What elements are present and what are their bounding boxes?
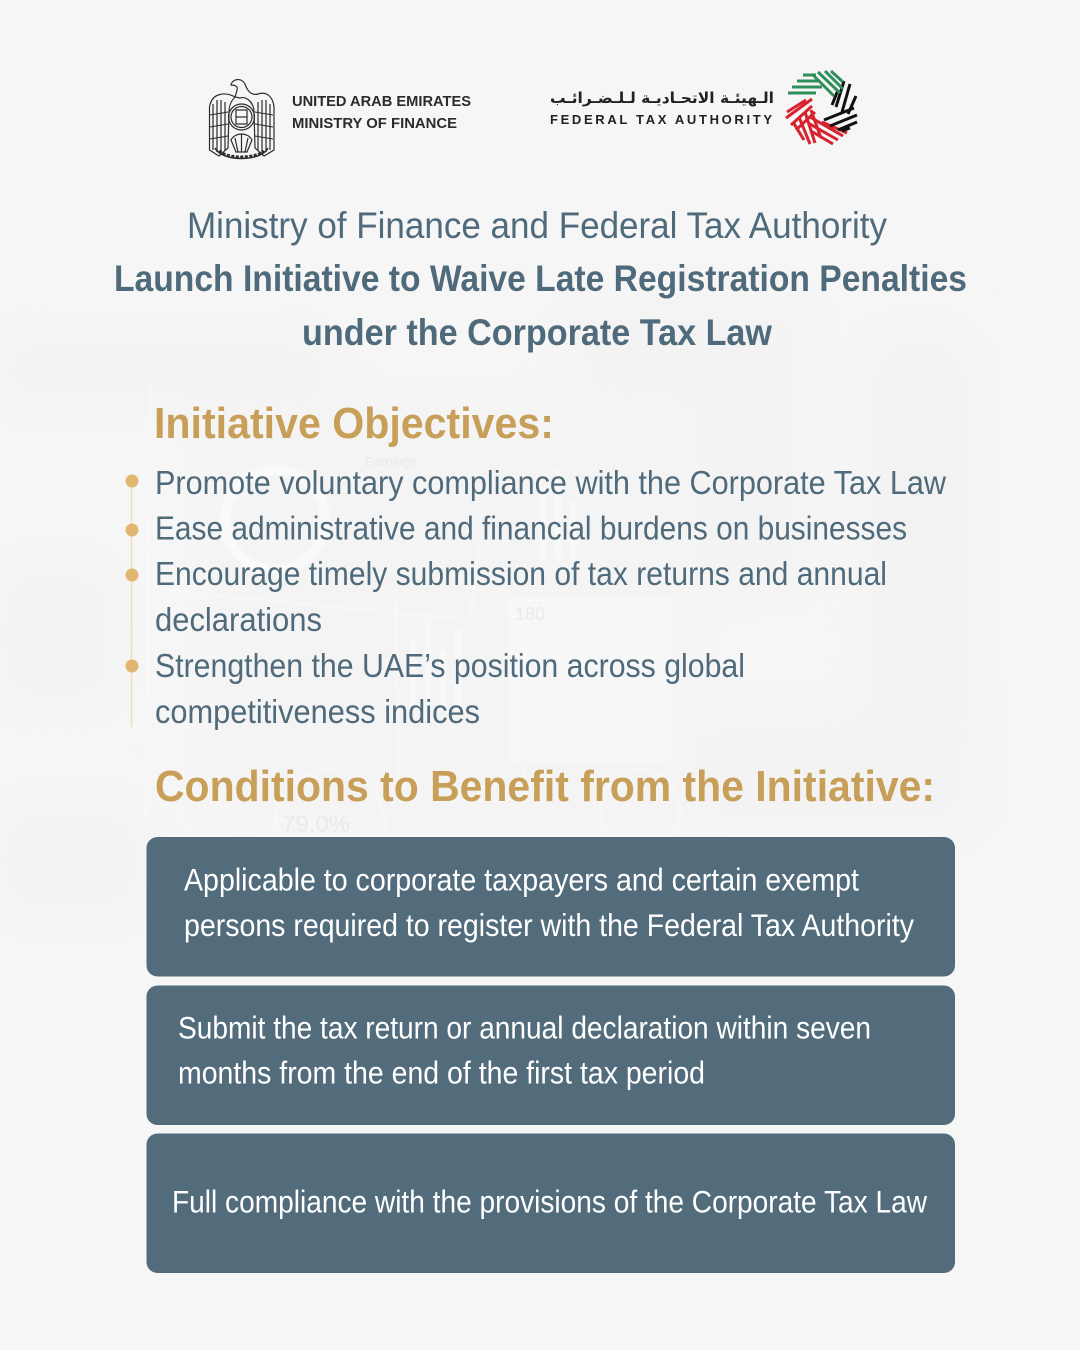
objective 2: Ease administrative and financial burdens on businesses [155, 510, 907, 546]
objective 4 [155, 647, 745, 730]
bullet 4 [126, 660, 138, 672]
panel: condition 3: Full compliance with the provisions of the Corporate Tax Law [172, 1184, 927, 1220]
panel: condition 1 [146, 837, 955, 976]
faded background photo: 180 [515, 604, 545, 624]
objective 3: Encourage timely submission of tax returns and annual [155, 555, 887, 592]
text: ministry name: UNITED ARAB EMIRATES [292, 94, 471, 110]
panel: condition 2 [146, 986, 955, 1125]
panel: objectives list [126, 464, 946, 730]
logo: UAE Ministry of Finance [210, 80, 471, 158]
text: authority name: الـهيئـة الاتحـاديـة لـلـضـرائـب [550, 89, 774, 107]
objective 4: Strengthen the UAE’s position across global [155, 647, 745, 684]
icon: FTA ring symbol [786, 71, 857, 144]
panel: condition 2: Submit the tax return or annual declaration within seven [178, 1010, 871, 1046]
objective 3 [155, 555, 887, 638]
bullet 3 [126, 568, 138, 582]
title: Ministry of Finance and Federal Tax Authority [187, 205, 887, 246]
panel: condition 2: months from the end of the first tax period [178, 1054, 705, 1090]
logo: Federal Tax Authority [550, 71, 857, 144]
bullet 2 [126, 524, 138, 536]
faded background photo [0, 300, 980, 910]
text: authority name [550, 89, 774, 127]
heading: initiative objectives: Initiative Objectives: [154, 399, 554, 448]
faded background photo: 79.0% [282, 811, 350, 838]
title: Launch Initiative to Waive Late Registration Penalties [114, 258, 967, 299]
icon: UAE emblem eagle [210, 80, 274, 158]
bullet 1 [126, 474, 138, 488]
objective 3: declarations [155, 601, 322, 638]
heading: conditions: Conditions to Benefit from the Initiative: [155, 762, 935, 811]
panel: condition 3 [146, 1134, 955, 1273]
objective 1: Promote voluntary compliance with the Corporate Tax Law [155, 464, 946, 501]
text: ministry name: MINISTRY OF FINANCE [292, 116, 457, 132]
faded background photo: Earnings [365, 454, 417, 469]
panel: condition 1: persons required to register with the Federal Tax Authority [184, 907, 914, 943]
title [114, 205, 967, 353]
panel: condition 1: Applicable to corporate taxpayers and certain exempt [184, 862, 859, 898]
objective 4: competitiveness indices [155, 693, 480, 730]
title: under the Corporate Tax Law [302, 312, 772, 353]
timeline line [130, 481, 132, 727]
text: ministry name [292, 94, 471, 132]
text: authority name: FEDERAL TAX AUTHORITY [550, 112, 772, 127]
